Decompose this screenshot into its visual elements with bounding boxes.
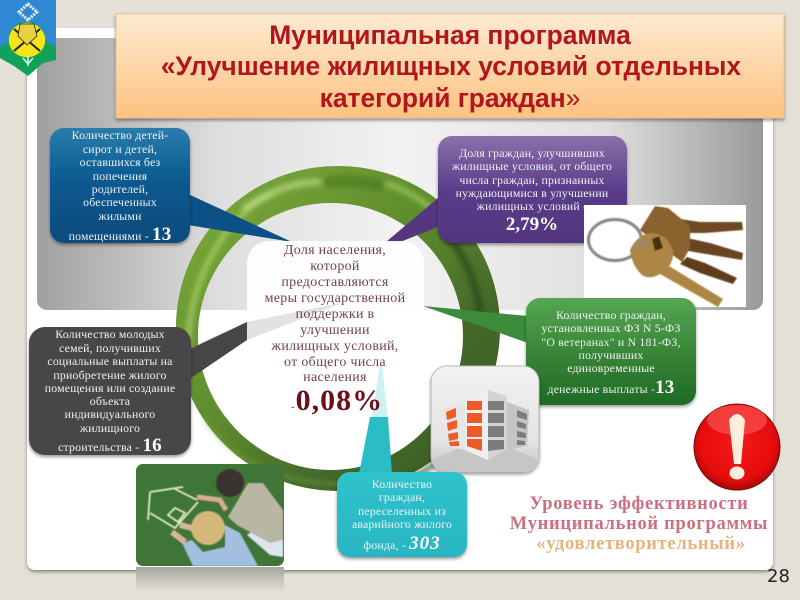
callout: green: единовременные <box>567 361 655 375</box>
callout: teal: переселенных из <box>358 504 446 518</box>
central card text: жилищных условий, <box>270 339 399 354</box>
callout: dark grey: жилищного <box>79 421 140 435</box>
callout: blue: Количество детей- <box>72 128 168 142</box>
callout: blue: попечения <box>93 169 148 183</box>
grey gradient panel <box>37 38 763 310</box>
callout: green: установленных ФЗ N 5-ФЗ <box>541 321 681 335</box>
callout: dark grey: помещения или создание <box>45 381 175 395</box>
icon: building <box>431 366 539 472</box>
faint grey wedge <box>200 298 300 352</box>
callout tail: blue <box>188 194 292 242</box>
callout: teal: Количество <box>372 477 432 491</box>
callout: dark grey: объекта <box>90 394 131 408</box>
central card text: населения <box>303 370 367 385</box>
central card <box>247 241 424 431</box>
central card text: от общего числа <box>284 355 386 370</box>
callout: dark grey: социальные выплаты на <box>47 354 173 368</box>
efficiency text: Уровень эффективности <box>529 494 749 514</box>
callout: green: получивших <box>579 348 643 362</box>
central card text: улучшении <box>300 323 370 338</box>
central card text: которой <box>310 259 360 274</box>
callout: purple: жилищных условий - <box>476 199 587 213</box>
callout: purple <box>438 136 627 243</box>
central card text: предоставляются <box>281 275 389 290</box>
green ring <box>176 166 500 491</box>
callout: green: "О ветеранах" и N 181-ФЗ, <box>541 335 681 349</box>
callout: dark grey: Количество молодых <box>55 327 165 341</box>
efficiency text: «удовлетворительный» <box>536 534 746 554</box>
callout: dark grey: строительства - 16 <box>58 435 162 456</box>
callout: teal: фонда, - 303 <box>363 533 441 554</box>
callout: blue: помещениями - 13 <box>69 224 171 245</box>
callout: green: Количество граждан, <box>556 308 666 322</box>
callout: blue: обеспеченных <box>83 195 157 209</box>
title <box>161 20 741 113</box>
title: категорий граждан» <box>320 83 580 113</box>
callout: blue <box>50 128 190 245</box>
photo: couple on grass <box>136 464 284 566</box>
emblem <box>0 0 56 76</box>
photo reflection <box>136 567 284 592</box>
callout: teal: аварийного жилого <box>352 517 452 531</box>
title: «Улучшение жилищных условий отдельных <box>161 51 741 81</box>
callout: purple: жилищные условия, от общего <box>451 159 612 173</box>
callout: green: денежные выплаты -13 <box>548 377 674 398</box>
callout tail: purple <box>386 198 438 242</box>
icon: red warning <box>694 404 780 490</box>
callout: dark grey: семей, получивших <box>59 341 161 355</box>
callout: purple: нуждающимися в улучшении <box>456 186 609 200</box>
page number: 28 <box>767 566 790 587</box>
central card text: Доля населения, <box>284 243 386 258</box>
callout tail: teal <box>359 417 392 474</box>
callout: teal: граждан, <box>379 490 425 504</box>
callout: blue: жилыми <box>97 209 142 223</box>
callout: blue: сирот и детей, <box>83 142 157 156</box>
callout: purple: 2,79% <box>506 214 558 235</box>
callout: dark grey: приобретение жилого <box>53 368 167 382</box>
callout: green <box>526 298 696 405</box>
header banner <box>116 14 784 118</box>
callout: dark grey: индивидуального <box>65 407 155 421</box>
photo: keys <box>584 205 746 307</box>
central card text <box>265 243 406 385</box>
faint teal wedge <box>372 358 388 418</box>
efficiency text: Муниципальной программы <box>510 514 768 534</box>
efficiency text <box>510 494 768 554</box>
callout: blue: оставшихся без <box>80 155 161 169</box>
callout: dark grey <box>29 327 191 456</box>
callout: blue: родителей, <box>92 182 148 196</box>
callout: teal <box>337 472 467 557</box>
callout tail: dark grey <box>188 322 247 380</box>
callout tail: green <box>423 306 528 343</box>
faint tail traces <box>247 302 345 340</box>
central card text: меры государственной <box>265 291 406 306</box>
callout: purple: Доля граждан, улучшивших <box>459 146 605 160</box>
central value: -0,08% <box>291 384 383 417</box>
title: Муниципальная программа <box>269 20 631 50</box>
callout: purple: числа граждан, признанных <box>459 173 605 187</box>
central card text: поддержки в <box>296 307 375 322</box>
